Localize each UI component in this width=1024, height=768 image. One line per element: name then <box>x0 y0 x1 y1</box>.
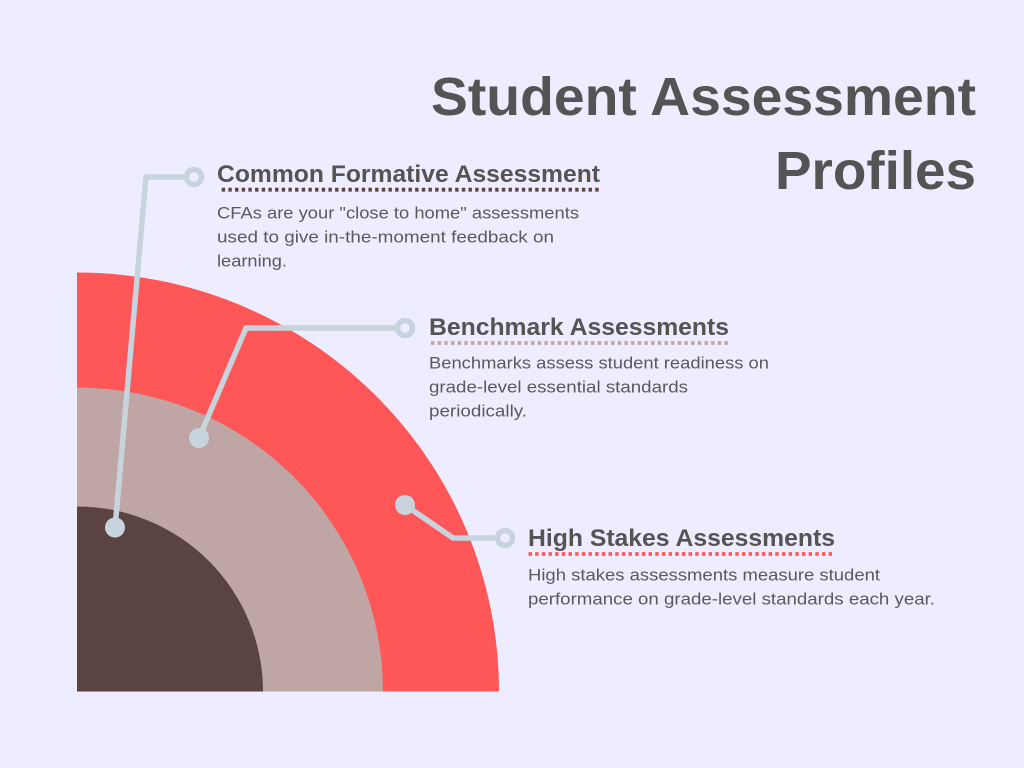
text block: high stakes assessments: performance on grade-level standards each year. <box>528 590 935 608</box>
connector: high stakes assessments <box>395 495 512 546</box>
text block: high stakes assessments <box>528 525 935 608</box>
text block: common formative assessment: learning. <box>217 252 287 270</box>
text block: benchmark assessments: Benchmark Assessments <box>429 314 729 341</box>
text block: common formative assessment <box>217 161 600 270</box>
connector: benchmark assessments <box>189 320 412 448</box>
title: Profiles <box>775 141 976 201</box>
text block: benchmark assessments <box>429 314 769 420</box>
text block: benchmark assessments: periodically. <box>429 402 527 420</box>
text block: high stakes assessments: High Stakes Assessments <box>528 525 835 552</box>
title: Student Assessment <box>431 67 976 127</box>
title <box>431 67 976 201</box>
text block: common formative assessment: CFAs are your "close to home" assessments <box>217 204 579 222</box>
connector: common formative assessment <box>105 170 202 538</box>
text block: benchmark assessments: Benchmarks assess student readiness on <box>429 354 769 372</box>
text block: common formative assessment: used to give in-the-moment feedback on <box>217 228 554 246</box>
text block: common formative assessment: Common Formative Assessment <box>217 161 600 188</box>
text block: benchmark assessments: grade-level essential standards <box>429 378 688 396</box>
quarter-circle chart <box>77 272 499 692</box>
text block: high stakes assessments: High stakes assessments measure student <box>528 566 880 584</box>
